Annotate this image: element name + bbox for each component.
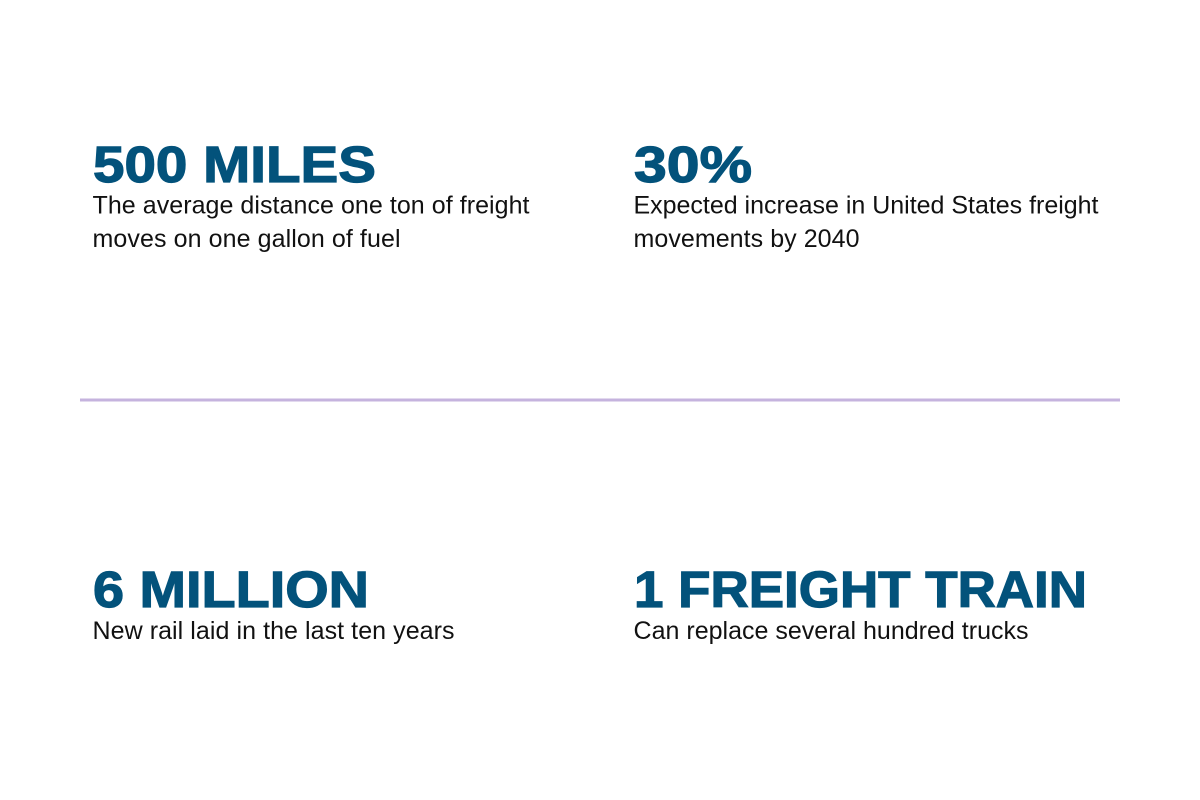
panel: 500 miles stat: [92, 136, 530, 253]
heading: 500 miles: 500 MILES: [93, 136, 376, 193]
text block: 500 miles description: moves on one gallon of fuel: [92, 225, 400, 253]
heading: 30%: 30%: [634, 136, 752, 193]
heading: 1 freight train: 1 FREIGHT TRAIN: [634, 561, 1087, 618]
text block: 1 freight train description: Can replace several hundred trucks: [634, 617, 1028, 645]
text block: 500 miles description: The average distance one ton of freight: [92, 192, 530, 220]
panel: 1 freight train stat: [634, 561, 1087, 645]
text block: 6 million description: New rail laid in the last ten years: [92, 617, 454, 645]
divider line: [80, 398, 1120, 402]
text block: 30% description: movements by 2040: [634, 225, 860, 253]
text block: 500 miles description: [92, 192, 530, 253]
panel: 30% stat: [634, 136, 1099, 253]
heading: 6 million: 6 MILLION: [93, 561, 369, 618]
text block: 30% description: Expected increase in United States freight: [634, 192, 1099, 220]
text block: 30% description: [634, 192, 1099, 253]
panel: 6 million stat: [92, 561, 454, 645]
